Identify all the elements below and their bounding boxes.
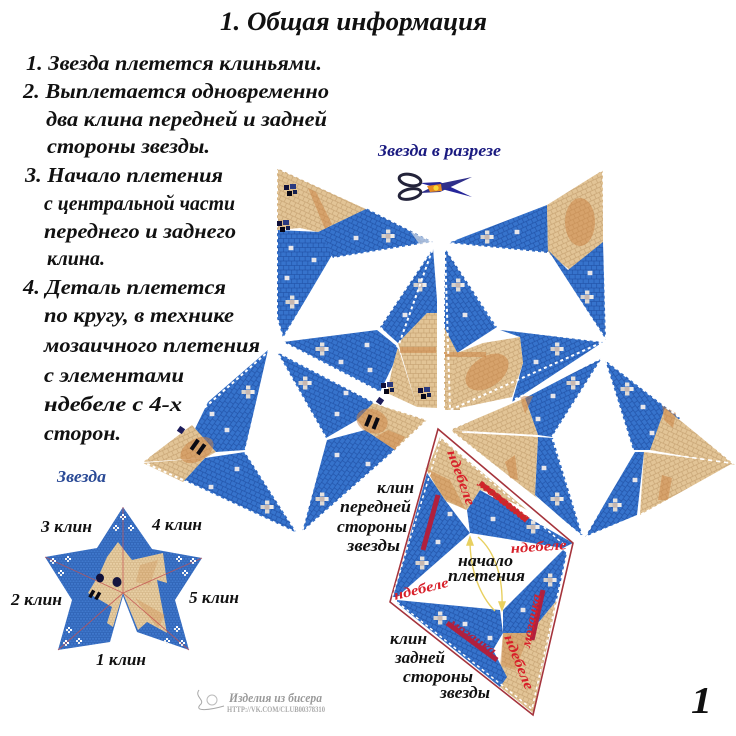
text block: numbered instructions: 4. Деталь плетется <box>22 275 226 299</box>
label: back wedge: стороны <box>403 667 473 686</box>
front wedge blue, right <box>467 490 573 548</box>
watermark: Изделия из бисера <box>228 691 322 705</box>
small star <box>45 507 202 650</box>
text block: numbered instructions: стороны звезды. <box>47 134 210 158</box>
ndebele and mosaic labels <box>392 448 567 692</box>
star wedge labels: 1 клин <box>96 650 146 669</box>
star tan centre <box>88 542 167 633</box>
text block: numbered instructions: переднего и заднего <box>44 219 236 243</box>
panel: wedge cross-section lower right, inner <box>450 358 602 537</box>
watermark: HTTP://VK.COM/CLUB00378310 <box>227 705 325 714</box>
beads in diagram <box>416 512 557 640</box>
label: back wedge <box>390 629 490 702</box>
diagram outline <box>390 429 573 715</box>
panel: highlighted wedge diagram <box>390 429 573 715</box>
label: front wedge: передней <box>340 497 411 516</box>
star wedge labels: 3 клин <box>40 517 92 536</box>
text block: numbered instructions: 3. Начало плетения <box>24 163 223 187</box>
mosaic stripes <box>423 483 543 660</box>
label: weaving start <box>448 551 525 585</box>
heading: star cross-section: Звезда в разрезе <box>377 141 501 160</box>
text block: numbered instructions <box>22 51 329 445</box>
panel: wedge cross-section lower right, outer <box>585 360 735 537</box>
watermark <box>198 690 325 714</box>
text block: numbered instructions: по кругу, в технике <box>44 303 234 327</box>
label: back wedge: задней <box>394 648 445 667</box>
star wedge labels: 2 клин <box>10 590 62 609</box>
ndebele and mosaic labels: ндебеле <box>443 448 477 508</box>
label: front wedge <box>337 478 414 555</box>
ndebele and mosaic labels: мозаика <box>519 593 545 650</box>
text block: numbered instructions: два клина передней и задней <box>46 107 327 131</box>
label: front wedge: клин <box>377 478 414 497</box>
text block: numbered instructions: 2. Выплетается одновременно <box>22 79 329 103</box>
ndebele and mosaic labels: ндебеле <box>510 538 567 557</box>
label: back wedge: звезды <box>439 683 490 702</box>
text block: numbered instructions: ндебеле с 4-х <box>44 392 182 416</box>
label: front wedge: звезды <box>346 536 400 555</box>
text block: numbered instructions: 1. Звезда плетется клиньями. <box>26 51 322 75</box>
page number: 1 <box>691 680 712 722</box>
star wedge labels <box>10 515 239 669</box>
panel: wedge cross-section lower left, outer <box>143 350 297 533</box>
ndebele and mosaic labels: мозаика <box>445 615 499 659</box>
star wedge labels: 5 клин <box>189 588 239 607</box>
panel: wedge cross-section top left <box>277 168 433 338</box>
star wedge labels: 4 клин <box>151 515 202 534</box>
back wedge blue, right <box>503 550 567 633</box>
ndebele and mosaic labels: ндебеле <box>500 633 536 692</box>
front wedge blue, left <box>393 473 470 597</box>
panel: wedge cross-section top right <box>448 170 606 340</box>
panel: wedge cross-section top centre right <box>444 246 603 410</box>
text block: numbered instructions: с центральной части <box>44 191 235 215</box>
back wedge tan <box>500 600 557 713</box>
text block: numbered instructions: клина. <box>47 246 105 270</box>
title: 1. Общая информация <box>220 7 487 36</box>
heading: star: Звезда <box>56 467 106 486</box>
yellow arrows <box>467 537 505 611</box>
ndebele and mosaic labels: ндебеле <box>392 576 450 604</box>
label: front wedge: стороны <box>337 517 407 536</box>
text block: numbered instructions: мозаичного плетения <box>43 333 260 357</box>
panel: wedge cross-section lower left, inner <box>277 352 427 532</box>
label: weaving start: плетения <box>448 566 525 585</box>
back wedge blue, left <box>397 600 507 687</box>
label: weaving start: начало <box>458 551 513 570</box>
star cut lines <box>45 507 202 650</box>
ndebele and mosaic labels: мозаика <box>474 476 533 526</box>
text block: numbered instructions: с элементами <box>44 363 184 387</box>
icon: scissors <box>398 172 472 201</box>
front wedge tan <box>427 437 527 510</box>
text block: numbered instructions: сторон. <box>44 421 121 445</box>
panel: wedge cross-section top centre left <box>283 246 438 408</box>
label: back wedge: клин <box>390 629 427 648</box>
